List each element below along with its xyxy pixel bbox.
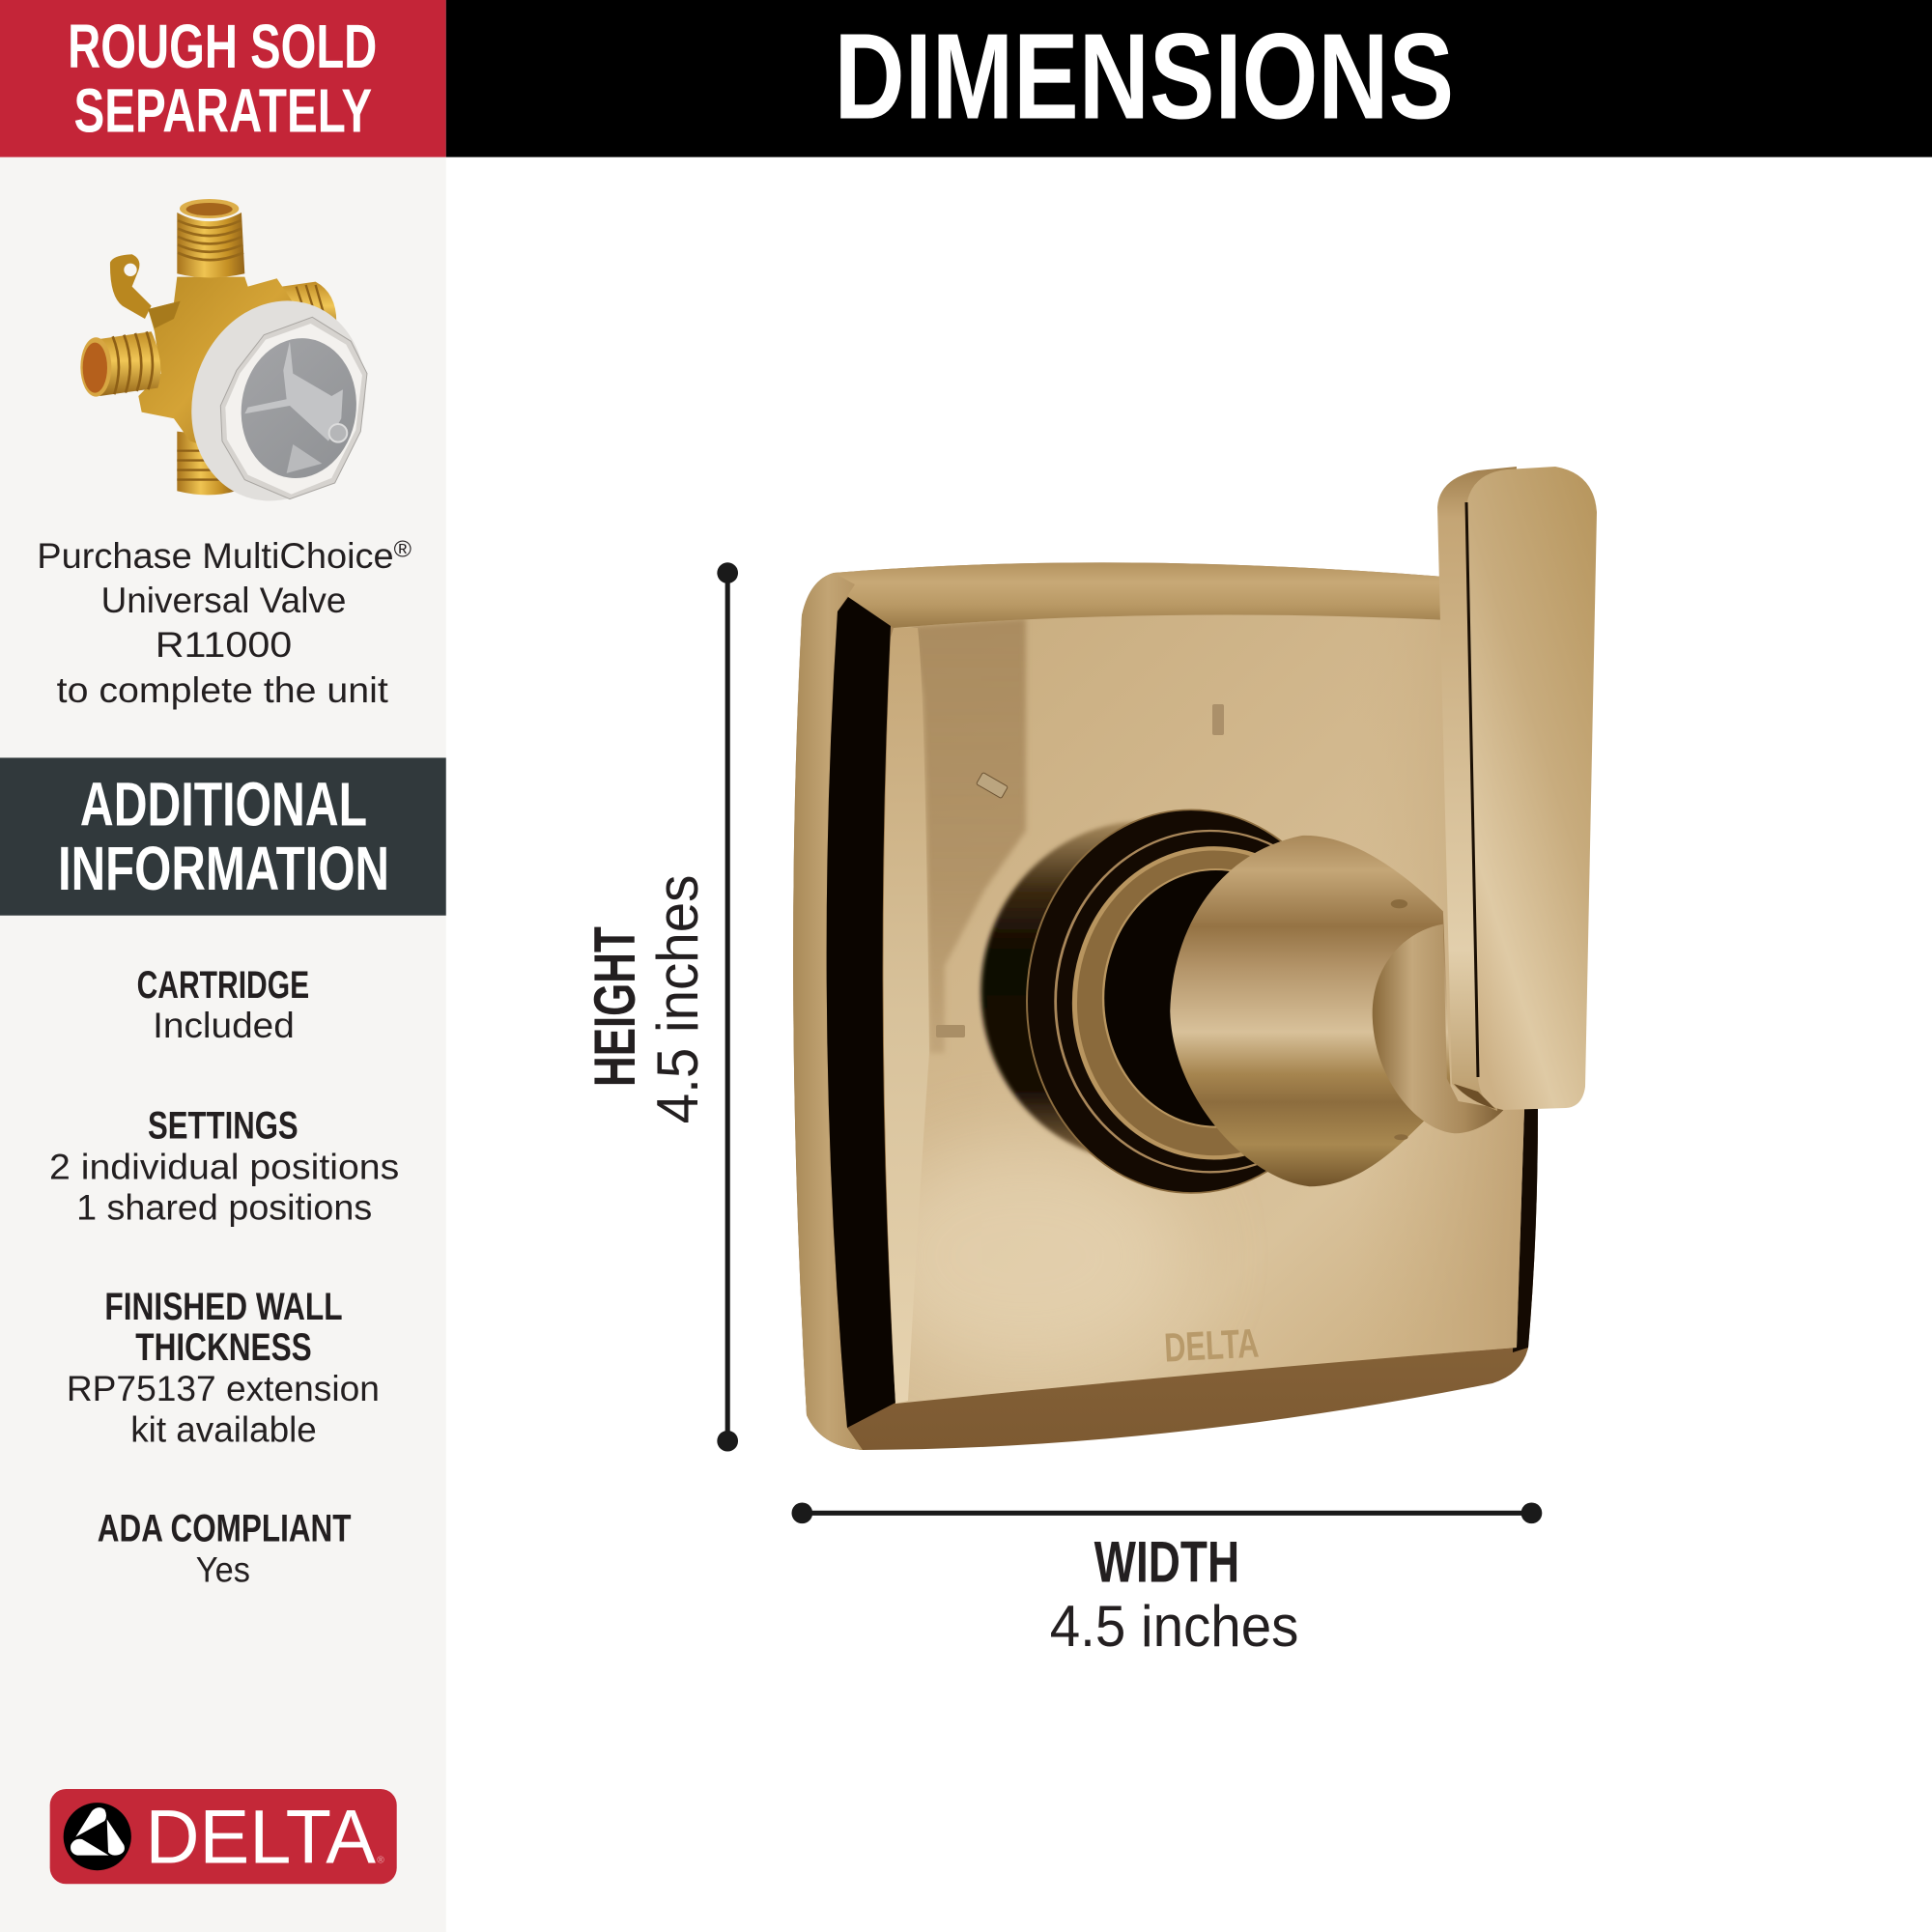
product: shower valve trim [793,467,1597,1450]
heading: additional information: INFORMATION [58,834,389,903]
logo: delta [50,1789,397,1884]
spec: cartridge: CARTRIDGE [137,964,309,1007]
banner: rough sold separately: SEPARATELY [74,75,372,145]
plate outer [793,562,1538,1450]
spec: ada compliant [98,1508,352,1590]
banner: dimensions title: DIMENSIONS [835,8,1454,144]
spec: finished wall thickness: THICKNESS [135,1326,312,1369]
label: height: HEIGHT [582,926,647,1087]
lever [1437,467,1597,1111]
banner: dimensions title [446,0,1932,157]
label: height: 4.5 inches [645,875,710,1123]
spec: cartridge [137,964,309,1045]
text: purchase note: to complete the unit [57,670,388,710]
arrow: width dimension line [792,1502,1542,1523]
spec: cartridge: Included [153,1006,295,1045]
spec: finished wall thickness [67,1286,380,1449]
label: width: 4.5 inches [1050,1594,1298,1659]
position marks [1212,704,1224,735]
arrow: height dimension line [717,562,738,1452]
icon: rough-in valve [80,199,391,524]
spec: settings: 1 shared positions [76,1188,372,1228]
text: purchase note: R11000 [156,625,292,665]
stamp: DELTA [1163,1321,1260,1371]
logo: delta: ® [377,1856,384,1866]
plate left rim [793,573,863,1450]
text: purchase note: ® [394,537,412,563]
spec: finished wall thickness: RP75137 extension [67,1369,380,1408]
plate face [884,615,1524,1404]
plate top rim [834,562,1449,628]
label: width [1050,1530,1298,1659]
text: purchase note [37,536,412,710]
panel: left sidebar [0,0,446,1932]
face shading [860,618,1526,1404]
logo: delta: DELTA [146,1794,376,1880]
banner: rough sold separately [0,0,446,157]
banner: rough sold separately: ROUGH SOLD [68,12,377,81]
right dark edge [1513,1109,1538,1352]
spec: finished wall thickness: kit available [130,1409,317,1449]
heading: additional information [0,757,446,916]
knob [981,810,1504,1193]
spec: ada compliant: Yes [196,1550,250,1590]
spec: settings: 2 individual positions [49,1148,399,1187]
text: purchase note: Universal Valve [101,581,346,620]
spec: settings [49,1105,399,1228]
label: height [582,875,710,1123]
spec: finished wall thickness: FINISHED WALL [104,1286,343,1328]
label: width: WIDTH [1094,1530,1239,1595]
spec: ada compliant: ADA COMPLIANT [98,1508,352,1550]
heading: additional information: ADDITIONAL [80,770,367,839]
spec: settings: SETTINGS [148,1105,298,1148]
left dark bevel [827,597,895,1428]
text: purchase note: Purchase MultiChoice [37,536,384,576]
